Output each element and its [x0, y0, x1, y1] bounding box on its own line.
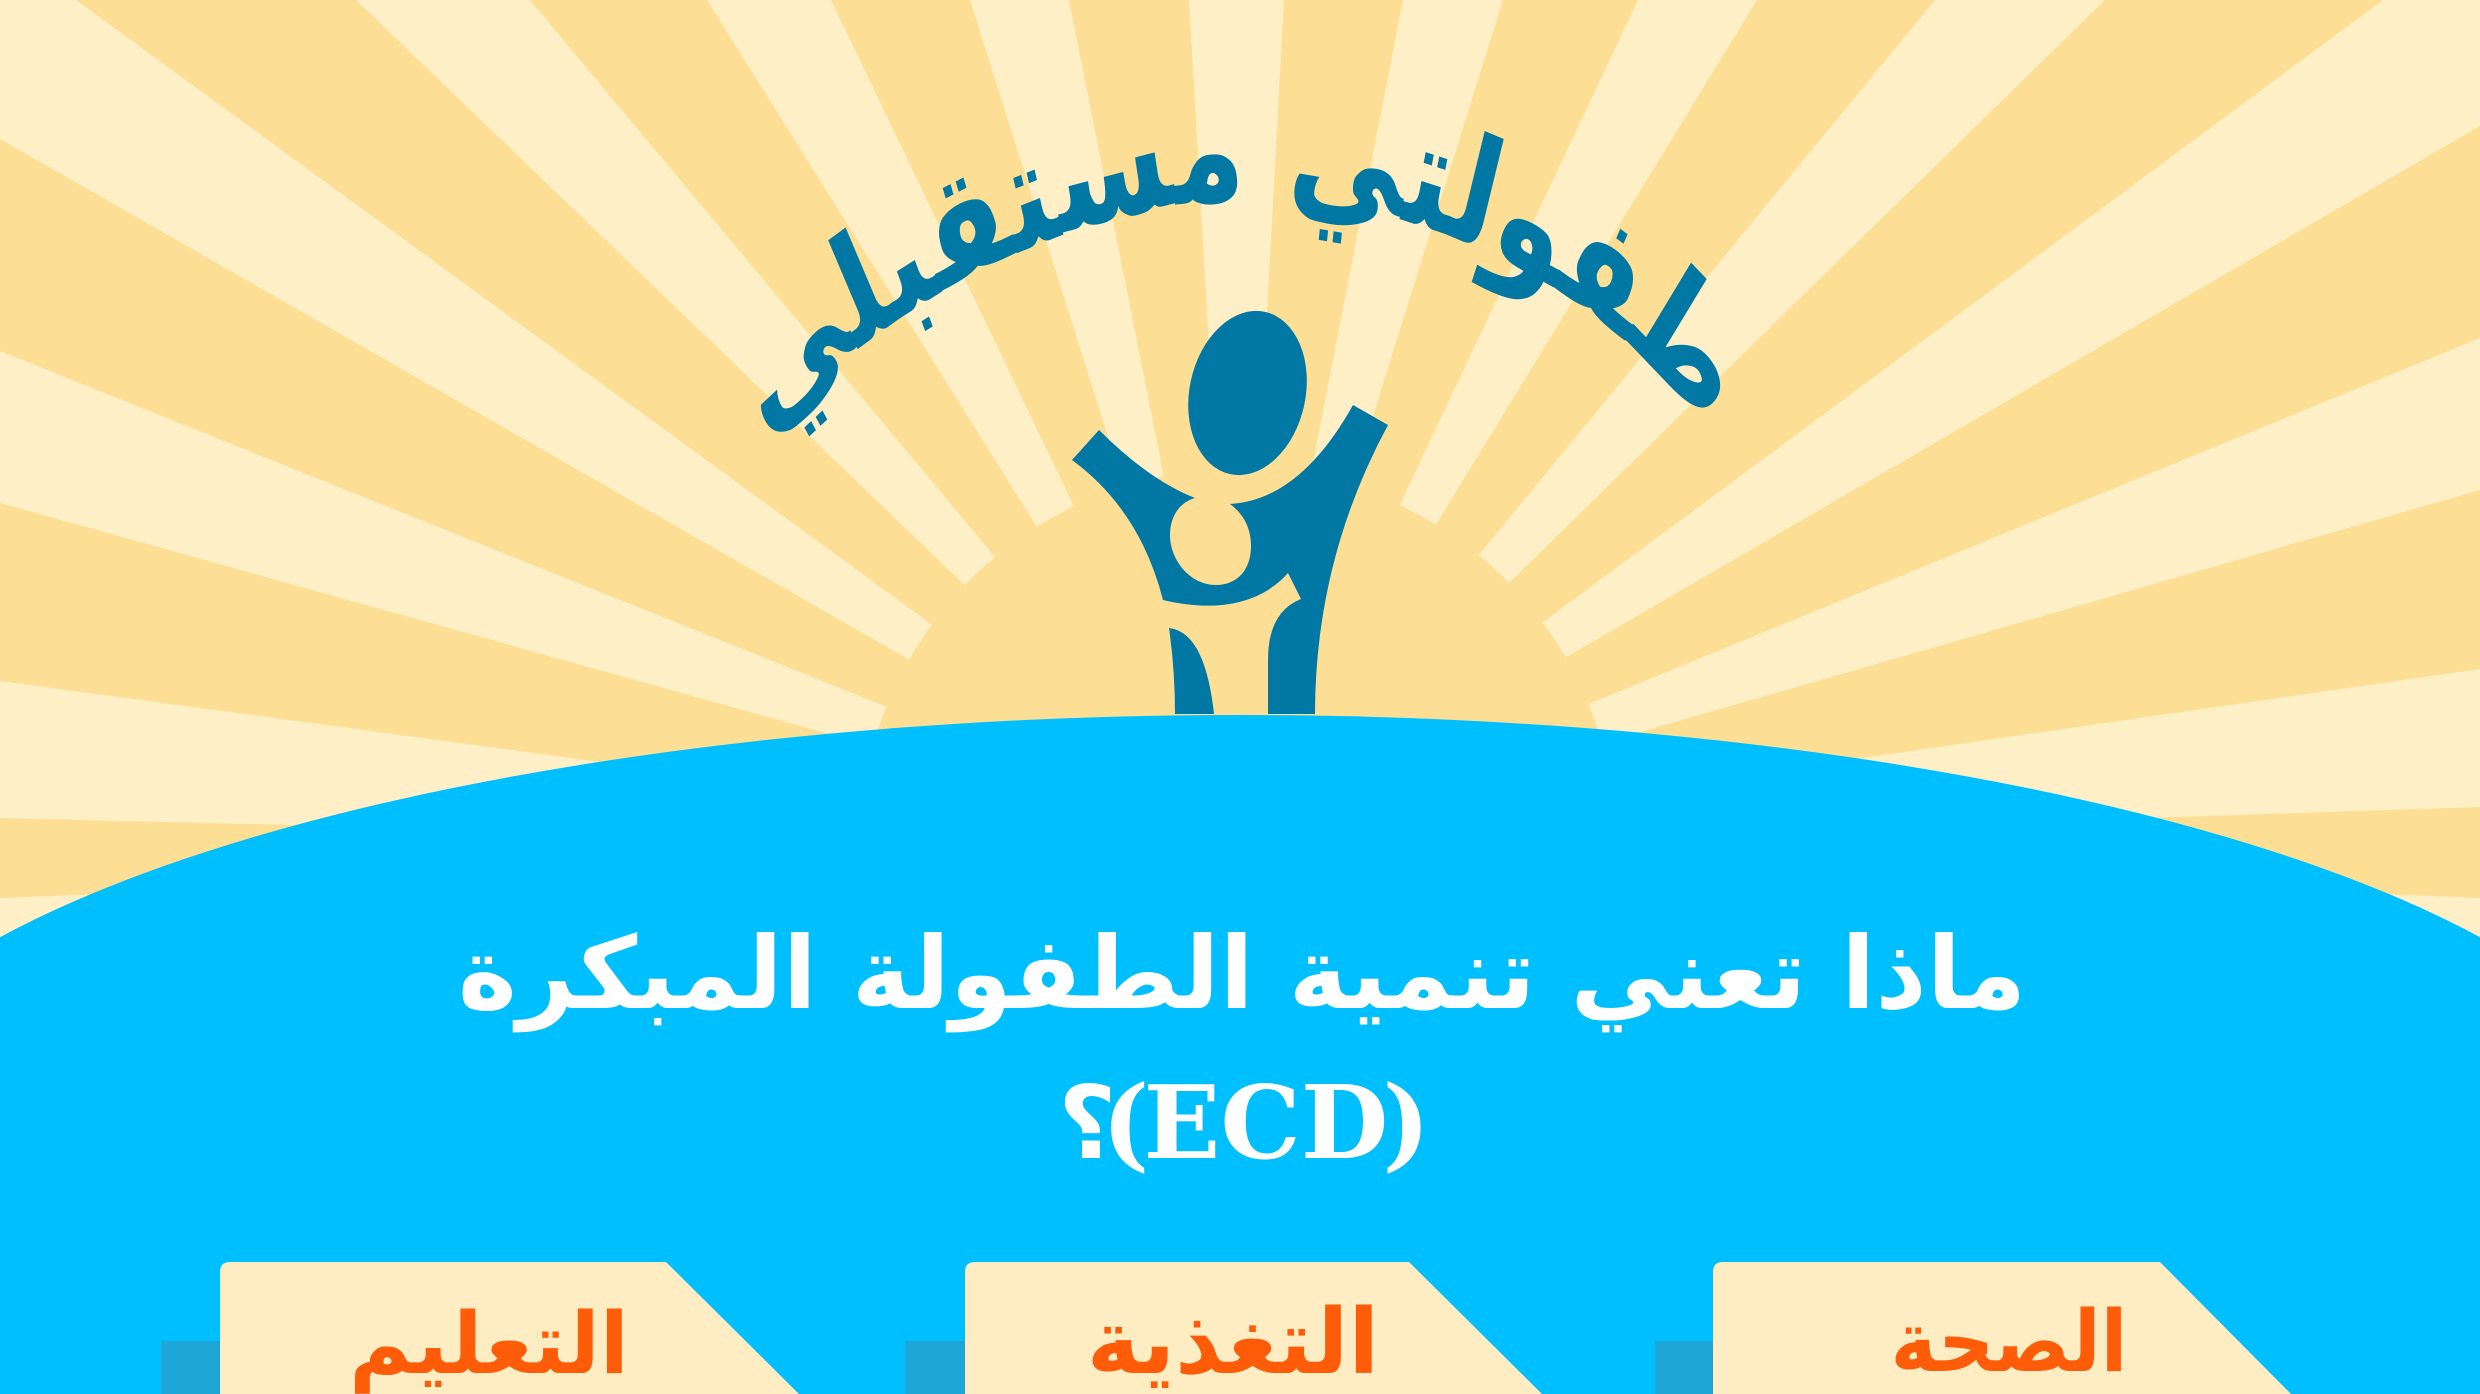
figure body [1072, 405, 1388, 714]
card: education: التعليم [349, 1295, 629, 1394]
blue ground panel [0, 715, 2480, 1394]
card: nutrition [905, 1262, 1542, 1394]
card: education [161, 1262, 799, 1394]
title line one: ماذا تعني تنمية الطفولة المبكرة [458, 915, 2026, 1033]
arc slogan text [760, 131, 1720, 436]
figure head [1174, 300, 1321, 486]
card: health [1655, 1262, 2291, 1394]
card: nutrition: التغذية [1087, 1290, 1379, 1394]
icon: child figure with raised arms [1072, 300, 1388, 714]
title [458, 915, 2026, 1182]
card: health: الصحة [1891, 1293, 2127, 1392]
arc slogan text: طفولتي مستقبلي [760, 131, 1720, 436]
figure leg [1169, 628, 1214, 714]
title line two: ؟(ECD) [1058, 1063, 1430, 1182]
